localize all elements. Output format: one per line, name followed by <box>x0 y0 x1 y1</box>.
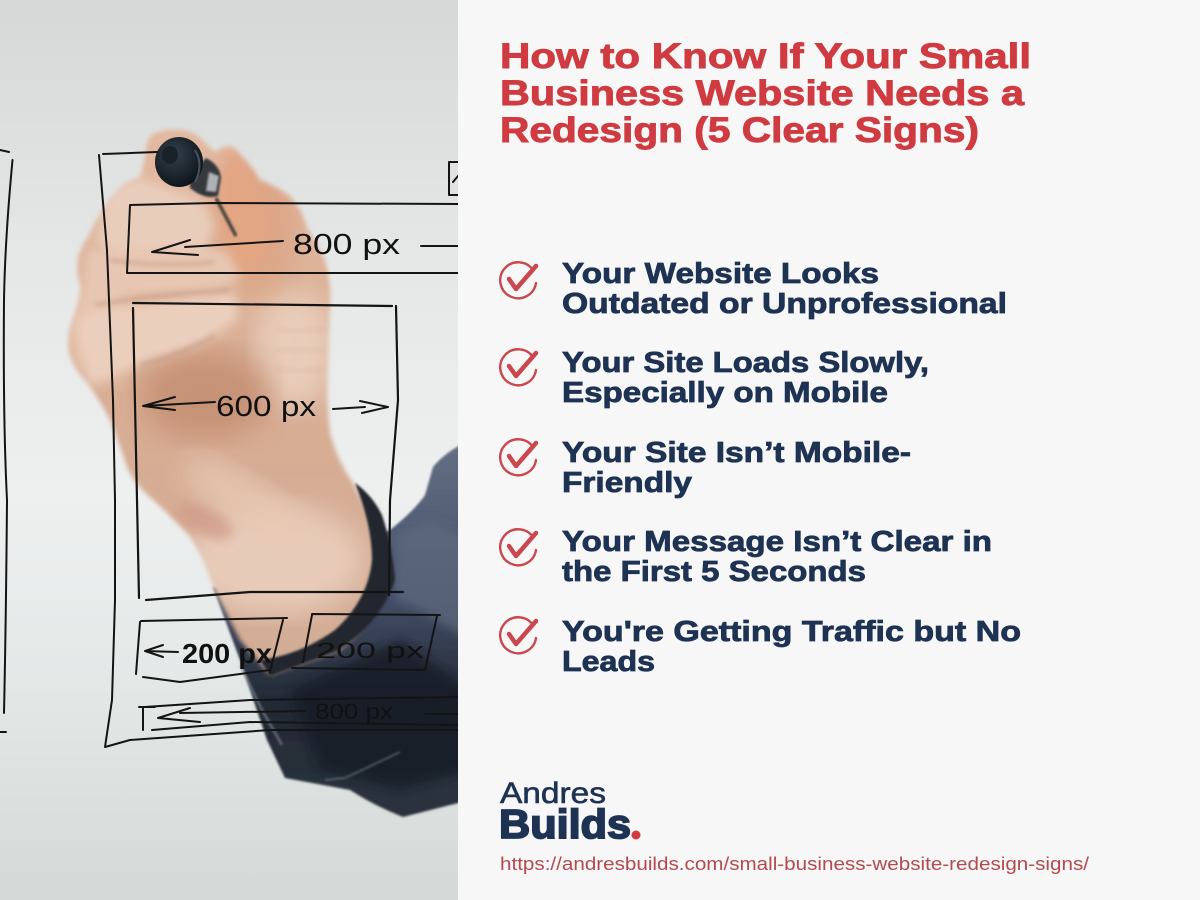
handwritten size labels <box>182 229 424 724</box>
title: How to Know If Your Small <box>500 37 1031 76</box>
sign 5 <box>500 616 1021 678</box>
icon: check circle <box>500 262 536 298</box>
handwritten size labels: 600 px <box>216 391 317 423</box>
sign 2: Your Site Loads Slowly, <box>562 347 929 379</box>
source URL: https://andresbuilds.com/small-business-website-redesign-signs/ <box>500 854 1089 874</box>
title <box>500 37 1031 150</box>
cuff <box>260 483 395 676</box>
logo: Andres Builds <box>499 777 640 847</box>
sign 1: Your Website Looks <box>562 258 879 290</box>
logo: Andres Builds: Builds <box>499 801 631 847</box>
title: Redesign (5 Clear Signs) <box>500 111 979 150</box>
icon: check circle <box>500 529 536 565</box>
wireframe sketch lines <box>0 150 458 747</box>
sign 1: Outdated or Unprofessional <box>562 288 1007 320</box>
sleeve <box>213 440 470 817</box>
icon: check circle <box>500 439 536 475</box>
handwritten size labels: 800 px <box>315 699 393 724</box>
icon: check circle <box>500 349 536 385</box>
sign 2: Especially on Mobile <box>562 377 888 409</box>
marker <box>155 137 236 236</box>
sign 3: Your Site Isn’t Mobile- <box>562 437 911 469</box>
sign 5: Leads <box>562 646 655 678</box>
sign 4: Your Message Isn’t Clear in <box>562 526 992 558</box>
sign 2 <box>500 347 929 409</box>
title: Business Website Needs a <box>500 74 1025 113</box>
handwritten size labels: 800 px <box>293 229 401 261</box>
checklist of five signs <box>500 258 1021 678</box>
logo: Andres Builds: Andres <box>500 777 606 810</box>
folded fingers <box>95 178 215 262</box>
sign 1 <box>500 258 1007 320</box>
handwritten size labels: 200 px <box>182 638 272 669</box>
hand <box>66 127 374 678</box>
handwritten size labels: 200 px <box>316 638 424 663</box>
page background <box>458 0 1200 900</box>
sign 4: the First 5 Seconds <box>562 556 866 588</box>
sign 4 <box>500 526 992 588</box>
sign 3: Friendly <box>562 467 692 499</box>
sign 5: You're Getting Traffic but No <box>562 616 1021 648</box>
icon: check circle <box>500 617 536 653</box>
photo: hand sketching a website wireframe <box>0 0 470 900</box>
sign 3 <box>500 437 911 499</box>
